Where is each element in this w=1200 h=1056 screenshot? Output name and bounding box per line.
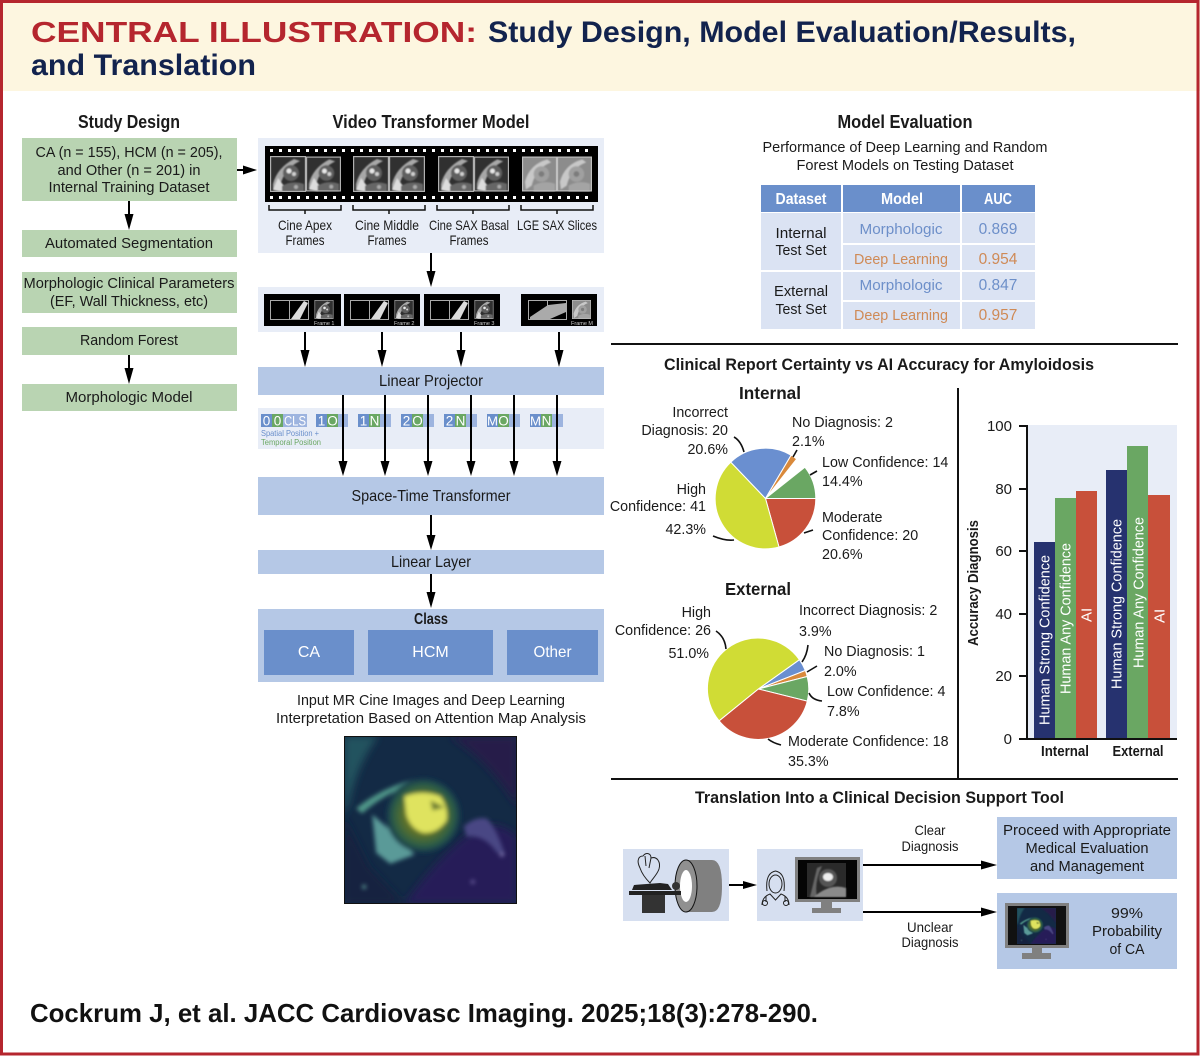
film strip panel: Cine Middle (355, 217, 419, 233)
box: linear projector (258, 367, 604, 395)
table: AUC: Model (881, 191, 923, 208)
table: AUC: Deep Learning (854, 251, 948, 268)
token sequence panel: N (542, 414, 551, 428)
label: clear diagnosis: Diagnosis (902, 838, 958, 854)
labels and leaders: Incorrect Diagnosis: 2 (799, 603, 937, 619)
arrow (124, 355, 134, 384)
panel: translation (623, 788, 1177, 969)
bar labels: Human Any Confidence (1058, 543, 1074, 694)
y axis tick labels: 20 (995, 668, 1012, 685)
labels and leaders: Low Confidence: 4 (827, 684, 945, 700)
labels and leaders: Low Confidence: 14 (822, 455, 948, 471)
table: AUC: Internal (776, 225, 826, 242)
bar labels: AI (1078, 608, 1096, 622)
box: morphologic clinical parameters (22, 272, 237, 313)
y axis tick labels: 0 (1004, 731, 1012, 748)
box: training dataset: CA (n = 155), HCM (n = 205), (36, 144, 222, 161)
table: AUC: 0.847 (979, 277, 1017, 294)
labels and leaders: No Diagnosis: 2 (792, 415, 893, 431)
x axis labels (1041, 744, 1164, 760)
label: unclear diagnosis (902, 919, 958, 950)
token sequence panel: O (412, 414, 423, 428)
token sequence panel: 2 (403, 414, 410, 428)
pie chart: internal (610, 383, 948, 563)
box: space-time transformer (258, 477, 604, 515)
arrow: clear diagnosis (863, 860, 997, 870)
box: linear layer (258, 550, 604, 574)
labels and leaders: 51.0% (668, 646, 709, 662)
heading: internal: Internal (739, 383, 801, 403)
frame patches panel: Frame M (571, 321, 593, 327)
film strip panel: Frames (368, 232, 406, 248)
frame patches panel: Frame 1 (314, 321, 334, 327)
labels and leaders: No Diagnosis: 1 (824, 644, 925, 660)
icon: clinician and monitor (757, 849, 863, 921)
table: AUC: AUC (984, 191, 1012, 208)
labels and leaders: Incorrect (672, 405, 728, 421)
y axis tick labels: 60 (995, 543, 1012, 560)
panel: class outputs: HCM (412, 644, 449, 661)
labels and leaders: 2.0% (824, 664, 857, 680)
heading: clinical report certainty: Clinical Report Certainty vs AI Accuracy for Amyloidosis (664, 355, 1094, 374)
label: clear diagnosis: Clear (914, 822, 946, 838)
arrow (729, 881, 757, 889)
table: AUC: 0.954 (979, 251, 1018, 268)
token sequence panel: 0 (263, 414, 270, 428)
panel: class outputs (258, 609, 604, 682)
header banner (0, 0, 1200, 91)
pie slices (707, 638, 809, 739)
token sequence panel: N (370, 414, 379, 428)
table: AUC: Morphologic (860, 277, 943, 294)
arrow (124, 201, 134, 230)
y axis title: Accuracy Diagnosis (965, 520, 982, 646)
labels and leaders: Diagnosis: 20 (641, 423, 728, 439)
table: AUC: External (774, 283, 828, 300)
heading: study design: Study Design (78, 112, 180, 132)
axes (1019, 425, 1177, 740)
box: automated segmentation (22, 230, 237, 257)
token sequence panel: O (498, 414, 509, 428)
title: and Translation (31, 49, 256, 82)
arrow: study design to transformer (237, 166, 257, 174)
token sequence panel: N (456, 414, 465, 428)
token sequence panel: 1 (360, 414, 367, 428)
y axis tick labels: 100 (987, 418, 1012, 435)
icon: MRI scanner with patient and heart (623, 849, 729, 921)
box: linear projector: Linear Projector (379, 373, 484, 390)
box: training dataset: and Other (n = 201) in (58, 162, 200, 179)
box: morphologic clinical parameters: (EF, Wall Thickness, etc) (50, 293, 208, 310)
panel: study design (22, 112, 237, 411)
caption: attention map: Input MR Cine Images and Deep Learning (297, 692, 565, 709)
box: morphologic model: Morphologic Model (66, 389, 192, 406)
heading: external: External (725, 579, 791, 599)
subtitle (762, 139, 1048, 174)
labels and leaders: 7.8% (827, 704, 860, 720)
arrows to space-time transformer (338, 395, 562, 476)
arrow: unclear diagnosis (863, 908, 997, 916)
label: clear diagnosis (902, 822, 958, 854)
film strip panel: LGE SAX Slices (517, 217, 597, 233)
panel: model evaluation (761, 112, 1048, 329)
arrow (426, 253, 436, 287)
arrow (426, 515, 436, 550)
film strip panel: Frames (286, 232, 324, 248)
table: AUC: Dataset (776, 191, 826, 208)
bar labels (1036, 517, 1168, 725)
heading: model evaluation: Model Evaluation (838, 112, 972, 132)
box: probability of CA: Probability (1092, 923, 1162, 940)
token sequence panel: 2 (446, 414, 453, 428)
label: unclear diagnosis: Unclear (907, 919, 953, 935)
film strip panel: Frames (450, 232, 488, 248)
labels and leaders: 20.6% (687, 442, 728, 458)
panel: class outputs: Other (534, 644, 572, 661)
table: AUC: Morphologic (860, 221, 943, 238)
title: Study Design, Model Evaluation/Results, (488, 16, 1076, 49)
token sequence panel: 0 (274, 414, 281, 428)
labels and leaders: Moderate (822, 510, 882, 526)
film strip panel (258, 138, 604, 253)
token sequence panel: O (327, 414, 338, 428)
table: AUC: Deep Learning (854, 307, 948, 324)
table: AUC: Test Set (776, 301, 827, 318)
box: space-time transformer: Space-Time Transformer (352, 488, 511, 505)
y axis tick labels: 80 (995, 481, 1012, 498)
attention map image (344, 736, 517, 904)
subtitle: Forest Models on Testing Dataset (796, 157, 1014, 174)
labels and leaders: 20.6% (822, 547, 863, 563)
panel: class outputs: Class (414, 611, 448, 628)
box: linear layer: Linear Layer (391, 554, 472, 571)
labels and leaders (610, 405, 948, 563)
box: automated segmentation: Automated Segmentation (45, 235, 213, 252)
table: AUC: 0.957 (979, 307, 1017, 324)
arrow (426, 574, 436, 608)
arrows to linear projector (300, 332, 564, 367)
caption: attention map (276, 692, 586, 727)
y axis tick labels: 40 (995, 606, 1012, 623)
token sequence panel: 1 (318, 414, 325, 428)
box: training dataset (22, 138, 237, 201)
box: proceed: Proceed with Appropriate (1003, 822, 1171, 839)
labels and leaders: Confidence: 41 (610, 499, 706, 515)
panel: class outputs: CA (298, 644, 320, 661)
bar labels: Human Strong Confidence (1108, 519, 1126, 689)
box: random forest: Random Forest (80, 332, 179, 349)
label: unclear diagnosis: Diagnosis (902, 934, 958, 950)
labels and leaders: 2.1% (792, 434, 825, 450)
box: probability of CA: 99% (1111, 905, 1143, 922)
labels and leaders: 3.9% (799, 624, 832, 640)
box: probability of CA: of CA (1110, 941, 1144, 958)
labels and leaders: 42.3% (665, 522, 706, 538)
bar labels: Human Any Confidence (1130, 517, 1148, 668)
labels and leaders: Confidence: 26 (615, 623, 711, 639)
token sequence panel: Temporal Position (261, 438, 321, 447)
x axis labels: Internal (1041, 744, 1089, 760)
labels and leaders: High (677, 482, 706, 498)
caption: attention map: Interpretation Based on Attention Map Analysis (276, 710, 586, 727)
labels and leaders: Confidence: 20 (822, 528, 918, 544)
bar chart: accuracy (965, 418, 1177, 760)
frame patches panel (258, 287, 604, 332)
y axis tick labels (987, 418, 1012, 748)
table: AUC: 0.869 (979, 221, 1017, 238)
box: morphologic clinical parameters: Morphologic Clinical Parameters (24, 275, 234, 292)
token sequence panel: M (530, 414, 541, 428)
token sequence panel: CLS (284, 414, 306, 428)
token sequence panel (258, 408, 604, 449)
citation: Cockrum J, et al. JACC Cardiovasc Imaging. 2025;18(3):278-290. (30, 998, 818, 1028)
film strip panel: Cine SAX Basal (429, 217, 509, 233)
frame patches panel: Frame 3 (474, 321, 494, 327)
token sequence panel: Spatial Position + (261, 429, 319, 438)
labels and leaders (615, 603, 949, 770)
labels and leaders: 14.4% (822, 474, 863, 490)
heading: translation: Translation Into a Clinical Decision Support Tool (695, 788, 1064, 807)
heading: video transformer model: Video Transformer Model (332, 112, 530, 132)
subtitle: Performance of Deep Learning and Random (762, 139, 1048, 156)
bar labels: Human Strong Confidence (1036, 555, 1054, 725)
labels and leaders: High (682, 605, 711, 621)
pie chart: external (615, 579, 949, 770)
box: probability of CA (997, 893, 1177, 969)
title (31, 16, 1076, 82)
pie slices (715, 448, 816, 549)
panel: video transformer model (258, 112, 604, 904)
box: proceed: Medical Evaluation (1026, 840, 1148, 857)
frame patches panel: Frame 2 (394, 321, 414, 327)
token sequence panel: M (487, 414, 498, 428)
box: training dataset: Internal Training Dataset (48, 179, 210, 196)
labels and leaders: 35.3% (788, 754, 829, 770)
bar labels: AI (1152, 609, 1168, 623)
bars (1034, 446, 1170, 739)
x axis labels: External (1112, 744, 1164, 760)
box: morphologic model (22, 384, 237, 411)
title: CENTRAL ILLUSTRATION: (31, 17, 477, 49)
table: AUC (761, 185, 1035, 329)
film strip panel: Cine Apex (278, 217, 332, 233)
box: random forest (22, 327, 237, 355)
table: AUC: Test Set (776, 242, 827, 259)
box: proceed: and Management (1030, 858, 1145, 875)
labels and leaders: Moderate Confidence: 18 (788, 734, 949, 750)
box: proceed (997, 817, 1177, 879)
